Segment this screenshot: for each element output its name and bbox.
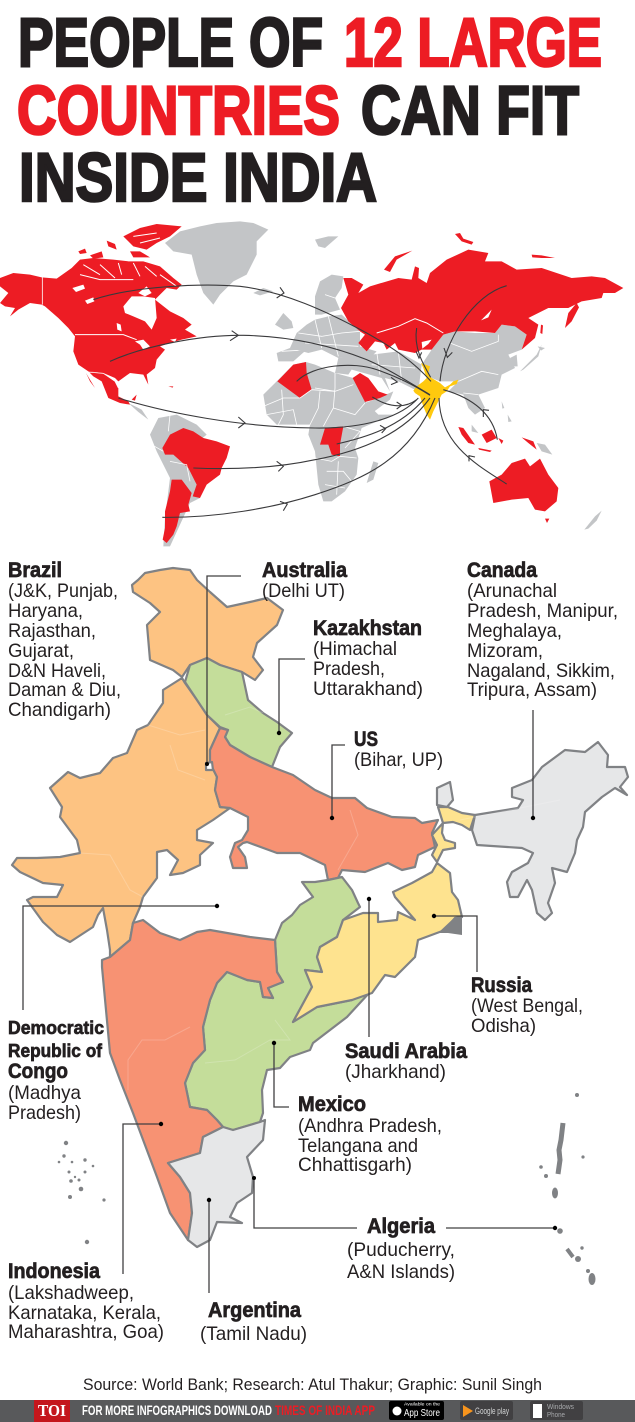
label: Saudi Arabia bbox=[345, 1040, 467, 1083]
label: Democratic Republic of Congo: Congo bbox=[8, 1060, 68, 1083]
footer message: TIMES OF INDIA APP bbox=[275, 1402, 375, 1418]
India map bbox=[12, 568, 628, 1285]
title: CAN FIT bbox=[361, 72, 579, 149]
Delhi bbox=[206, 762, 213, 770]
label: Indonesia: Maharashtra, Goa) bbox=[8, 1321, 164, 1343]
Andaman and Nicobar islands bbox=[539, 1093, 596, 1285]
red: Mexico bbox=[86, 371, 173, 405]
Google play badge bbox=[460, 1401, 513, 1420]
source line: Source: World Bank; Research: Atul Thakur; Graphic: Sunil Singh bbox=[83, 1375, 542, 1394]
label: Democratic Republic of Congo: Democratic bbox=[8, 1017, 104, 1038]
label: Russia: Russia bbox=[471, 974, 532, 997]
red: Saudi Arabia bbox=[353, 373, 388, 402]
Russia states north Bengal (yellow) bbox=[432, 807, 475, 862]
label: Canada: Nagaland, Sikkim, bbox=[467, 660, 615, 682]
leader lines bbox=[23, 576, 557, 1293]
label: Argentina: (Tamil Nadu) bbox=[200, 1323, 307, 1345]
label: Indonesia: Karnataka, Kerala, bbox=[8, 1302, 161, 1324]
label: Australia: (Delhi UT) bbox=[262, 580, 345, 602]
label: Mexico bbox=[298, 1093, 442, 1176]
title: PEOPLE OF bbox=[18, 4, 323, 81]
label: Brazil: Brazil bbox=[8, 559, 62, 582]
label: Kazakhstan: Uttarakhand) bbox=[313, 678, 423, 700]
label: Russia bbox=[471, 974, 583, 1037]
label: Saudi Arabia: Saudi Arabia bbox=[345, 1040, 467, 1063]
label: Russia: (West Bengal, bbox=[471, 995, 583, 1017]
water and borders on North America bbox=[42, 233, 177, 388]
label: Algeria: A&N Islands) bbox=[347, 1261, 455, 1283]
Windows Phone badge: Windows bbox=[547, 1402, 574, 1411]
label: Mexico: Mexico bbox=[298, 1093, 366, 1116]
Lakshadweep islands bbox=[58, 1141, 106, 1244]
Indonesia states (salmon) bbox=[102, 920, 283, 1240]
label: Indonesia: (Lakshadweep, bbox=[8, 1282, 134, 1304]
India highlight bbox=[413, 363, 458, 420]
label: US: (Bihar, UP) bbox=[354, 749, 443, 771]
label: Democratic Republic of Congo: (Madhya bbox=[8, 1082, 81, 1104]
label: Canada: (Arunachal bbox=[467, 580, 557, 602]
label: Canada: Canada bbox=[467, 559, 537, 582]
Google play badge: Google play bbox=[475, 1406, 509, 1417]
red: Brazil bbox=[162, 428, 230, 498]
footer bar bbox=[0, 1400, 635, 1422]
Africa west borders bbox=[152, 350, 335, 481]
label: Algeria: (Puducherry, bbox=[347, 1239, 455, 1261]
red: Algeria bbox=[277, 362, 312, 398]
US states (salmon) bbox=[210, 728, 438, 880]
label: Democratic Republic of Congo: Pradesh) bbox=[8, 1102, 81, 1124]
world map with arrows to India bbox=[0, 221, 623, 546]
label: Brazil bbox=[8, 559, 121, 721]
red: Canada and US mainland bbox=[0, 258, 197, 385]
grey landmasses, east bbox=[290, 236, 602, 530]
label: Kazakhstan: (Himachal bbox=[313, 638, 397, 660]
label: Canada bbox=[467, 559, 618, 701]
label: Australia: Australia bbox=[262, 559, 347, 582]
red: Australia bbox=[489, 459, 558, 523]
label: Democratic Republic of Congo: Republic of bbox=[8, 1040, 103, 1061]
App Store badge bbox=[389, 1401, 444, 1420]
label: Mexico: Telangana and bbox=[298, 1135, 418, 1157]
Mexico states (green) bbox=[185, 877, 370, 1130]
label: Russia: Odisha) bbox=[471, 1015, 536, 1037]
title: INSIDE INDIA bbox=[19, 139, 377, 216]
footer message: FOR MORE INFOGRAPHICS DOWNLOAD bbox=[82, 1402, 272, 1418]
Kazakhstan states (green) bbox=[185, 658, 292, 767]
Brazil states (orange) bbox=[132, 568, 283, 680]
red: Russia and Kazakhstan bbox=[341, 250, 623, 353]
Argentina state (grey) bbox=[168, 1120, 265, 1247]
water and borders on Russia bbox=[377, 310, 498, 395]
label: Kazakhstan: Pradesh, bbox=[313, 658, 385, 680]
internal state borders bbox=[80, 707, 560, 1090]
label: Brazil: Gujarat, bbox=[8, 640, 74, 662]
label: Brazil: Haryana, bbox=[8, 600, 83, 622]
Sikkim (grey) bbox=[437, 782, 453, 807]
TOI logo: TOI bbox=[38, 1401, 66, 1420]
borders in Africa, Europe and Middle East bbox=[298, 295, 415, 495]
red: Indonesia bbox=[458, 427, 537, 452]
label: Brazil: D&N Haveli, bbox=[8, 660, 106, 682]
east hemisphere frame bbox=[290, 233, 623, 530]
label: US: US bbox=[354, 728, 378, 751]
label: Mexico: (Andhra Pradesh, bbox=[298, 1115, 442, 1137]
title bbox=[17, 4, 602, 216]
grey landmasses, west bbox=[128, 221, 393, 546]
label: Canada: Meghalaya, bbox=[467, 620, 562, 642]
label: Canada: Tripura, Assam) bbox=[467, 679, 597, 701]
label: Algeria bbox=[347, 1215, 455, 1283]
label: Mexico: Chhattisgarh) bbox=[298, 1154, 412, 1176]
label: US bbox=[354, 728, 443, 771]
label: Brazil: Rajasthan, bbox=[8, 620, 96, 642]
title: COUNTRIES bbox=[17, 72, 340, 149]
label: Brazil: Daman & Diu, bbox=[8, 679, 121, 701]
label: Algeria: Algeria bbox=[367, 1215, 435, 1238]
Canada states (grey) bbox=[472, 742, 628, 920]
label: Australia bbox=[262, 559, 347, 602]
red: Arctic islands bbox=[78, 224, 182, 259]
label: Argentina: Argentina bbox=[208, 1299, 301, 1322]
label: Argentina bbox=[200, 1299, 307, 1345]
label: Brazil: Chandigarh) bbox=[8, 699, 111, 721]
red: Arctic Russian islands bbox=[384, 233, 579, 334]
Windows Phone badge: Phone bbox=[547, 1410, 565, 1419]
App Store badge: Available on the bbox=[404, 1402, 441, 1406]
label: Saudi Arabia: (Jharkhand) bbox=[345, 1061, 446, 1083]
red: Argentina bbox=[163, 480, 192, 543]
label: Canada: Mizoram, bbox=[467, 640, 543, 662]
label: Kazakhstan: Kazakhstan bbox=[313, 617, 422, 640]
label: Indonesia: Indonesia bbox=[8, 1260, 100, 1283]
label: Kazakhstan bbox=[313, 617, 423, 700]
Russia states (yellow) bbox=[293, 863, 462, 1022]
label: Indonesia bbox=[8, 1260, 164, 1343]
label: Brazil: (J&K, Punjab, bbox=[8, 580, 118, 602]
label: Canada: Pradesh, Manipur, bbox=[467, 600, 618, 622]
red: DR Congo bbox=[320, 426, 343, 456]
App Store badge: App Store bbox=[404, 1407, 440, 1419]
Sundarbans bbox=[438, 917, 462, 935]
Windows Phone badge bbox=[530, 1401, 583, 1420]
label: Democratic Republic of Congo bbox=[8, 1017, 104, 1124]
arrows from countries to India bbox=[93, 285, 507, 517]
Brazil states south (orange) bbox=[12, 678, 230, 957]
